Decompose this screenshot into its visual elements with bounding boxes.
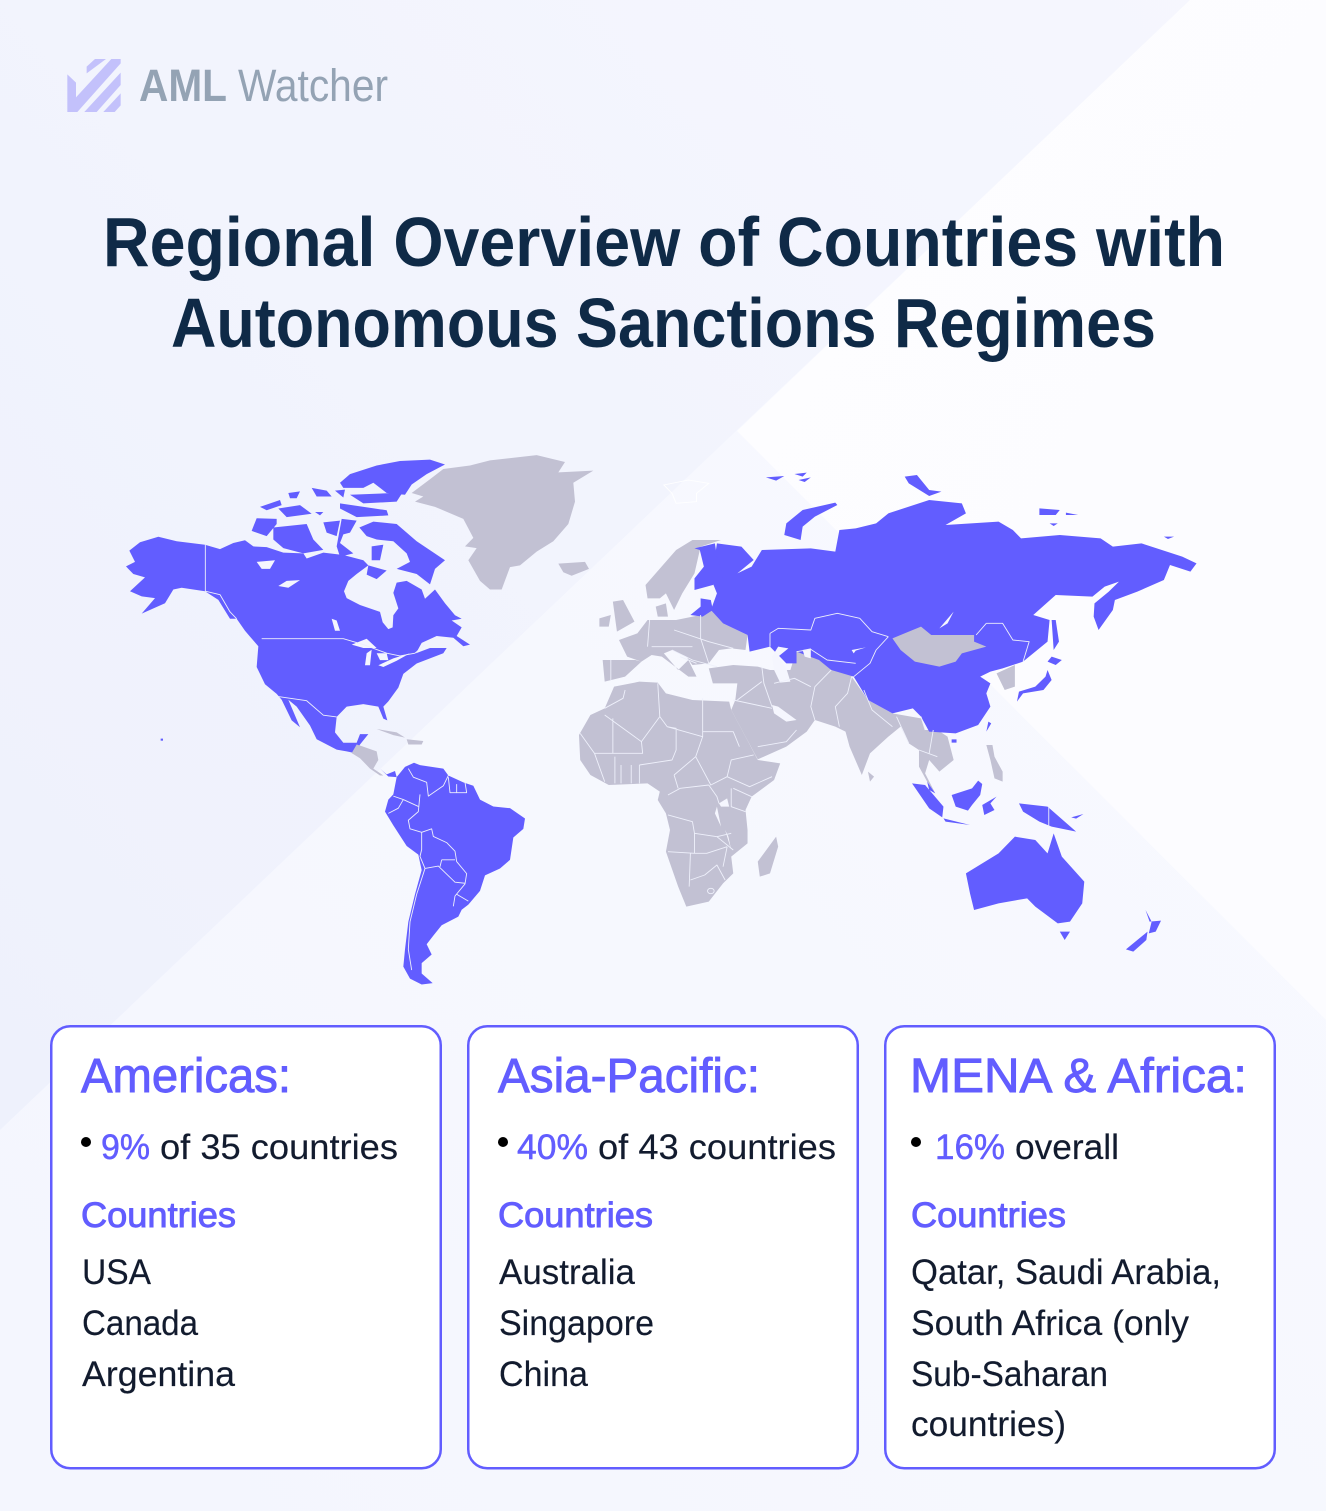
country list: Canada (82, 1304, 198, 1343)
panel: Americas (51, 1026, 441, 1468)
Greenland and Iceland (412, 455, 593, 589)
heading: Asia-Pacific: Asia-Pacific: (498, 1050, 760, 1103)
bullet: 16% overall (911, 1128, 1119, 1167)
Mongolia (892, 627, 986, 667)
country list: Argentina (82, 1355, 236, 1394)
panel: Asia-Pacific (468, 1026, 858, 1468)
country list: China (499, 1355, 589, 1394)
North America mainland (126, 537, 470, 753)
Middle East and Asia (709, 650, 1015, 793)
country list: South Africa (only (911, 1304, 1190, 1343)
bullet: 9% of 35 countries: of 35 countries (160, 1128, 398, 1167)
title: Autonomous Sanctions Regimes (171, 284, 1156, 362)
bullet: 16% overall: 16% (935, 1128, 1005, 1167)
bullet: 16% overall: overall (1015, 1128, 1119, 1167)
logo wordmark (139, 60, 388, 111)
countries label: Countries (498, 1196, 653, 1235)
title: Regional Overview of Countries with (103, 203, 1225, 281)
logo wordmark: Watcher (238, 60, 388, 111)
Indonesia and New Guinea (912, 781, 1083, 832)
country list: Qatar, Saudi Arabia, (911, 1253, 1221, 1292)
logo (67, 59, 388, 112)
borders: Americas (205, 545, 468, 970)
country list (911, 1253, 1221, 1444)
world map (126, 455, 1197, 985)
country list: Sub-Saharan (911, 1355, 1108, 1394)
South America (380, 763, 525, 985)
heading: Americas: Americas: (81, 1050, 291, 1103)
title (103, 203, 1225, 362)
heading: MENA and Africa: MENA & Africa: (910, 1050, 1247, 1103)
seas and lakes (715, 612, 954, 850)
logo wordmark: AML (139, 60, 227, 111)
panel: MENA and Africa (885, 1026, 1275, 1468)
Australia (966, 833, 1084, 940)
bullet: 40% of 43 countries: 40% (517, 1128, 588, 1167)
Africa (579, 682, 780, 907)
icon: logo mark (67, 59, 121, 112)
countries label: Countries (81, 1196, 236, 1235)
borders: Eurasia and Africa (611, 613, 1049, 827)
Central America and Caribbean (352, 729, 423, 775)
country list: countries) (911, 1405, 1066, 1444)
Canadian Arctic islands (252, 460, 445, 584)
Arctic and Pacific islands (766, 473, 1174, 743)
lakes (257, 560, 410, 667)
country list (82, 1253, 236, 1394)
country list: USA (82, 1253, 152, 1292)
bullet: 40% of 43 countries (498, 1128, 836, 1167)
Hawaii (161, 739, 163, 741)
map: Americas and Greenland (126, 455, 593, 985)
bullet: 9% of 35 countries: 9% (101, 1128, 150, 1167)
country list: Singapore (499, 1304, 654, 1343)
country list: Australia (499, 1253, 636, 1292)
countries label: Countries (911, 1196, 1066, 1235)
map: Eurasia, Africa and Oceania (579, 473, 1197, 952)
Svalbard (664, 480, 709, 503)
Russia, Kazakhstan and China (711, 500, 1197, 733)
country list (499, 1253, 654, 1394)
New Zealand (1126, 910, 1161, 952)
Europe (599, 540, 748, 682)
bullet: 40% of 43 countries: of 43 countries (598, 1128, 836, 1167)
Finland and Baltics (690, 543, 723, 617)
